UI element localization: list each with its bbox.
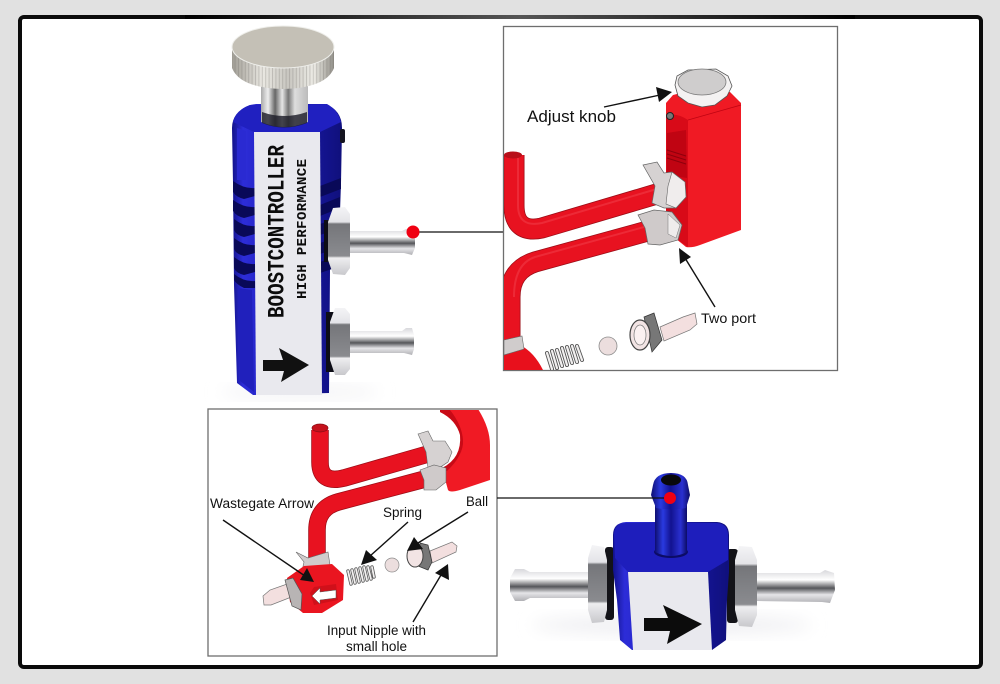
callout line: upper nipple to diagram bbox=[406, 226, 504, 238]
blue body bbox=[613, 522, 729, 650]
lower nipple bbox=[326, 308, 414, 375]
cap bbox=[675, 69, 732, 107]
top nipple bbox=[654, 546, 688, 558]
label: wastegate arrow: Wastegate Arrow bbox=[210, 496, 314, 511]
knob stem bbox=[261, 86, 308, 127]
label: input nipple: small hole bbox=[346, 639, 407, 654]
red body top right bbox=[440, 409, 490, 492]
drop shadow bbox=[220, 386, 380, 398]
right nipple bbox=[757, 570, 835, 603]
fittings bbox=[418, 431, 452, 470]
cooling fins bbox=[233, 178, 341, 288]
label: input nipple: Input Nipple with bbox=[327, 623, 426, 638]
label: two port: Two port bbox=[701, 310, 756, 326]
tubes bbox=[320, 430, 428, 479]
callout line: top nipple to diagram bbox=[497, 492, 676, 504]
spring bbox=[547, 346, 582, 369]
panel: adjust knob and two port diagram bbox=[504, 26, 838, 370]
nipple bbox=[430, 542, 457, 563]
label: ball: Ball bbox=[466, 494, 488, 509]
red valve bbox=[287, 564, 344, 613]
upper nipple bbox=[324, 207, 415, 275]
lower red part bbox=[504, 345, 543, 370]
fittings bbox=[643, 162, 686, 208]
left nipple bbox=[262, 584, 290, 606]
panel: wastegate exploded diagram bbox=[208, 409, 497, 656]
arrow: two port bbox=[679, 248, 715, 307]
arrow: spring bbox=[361, 522, 408, 565]
label plate with text: HIGH PERFORMANCE bbox=[295, 159, 311, 299]
side screw bbox=[340, 129, 345, 143]
label: adjust knob: Adjust knob bbox=[527, 108, 616, 126]
arrow: ball bbox=[407, 512, 468, 551]
white label with arrow bbox=[628, 572, 712, 650]
label plate with text bbox=[254, 132, 322, 395]
arrow: adjust knob bbox=[604, 87, 672, 107]
drop shadow bbox=[532, 615, 812, 635]
ball bbox=[385, 558, 399, 572]
nipple bbox=[660, 313, 697, 341]
knurled knob bbox=[232, 47, 334, 89]
ball bbox=[599, 337, 617, 355]
blue body bbox=[232, 104, 342, 395]
spring bbox=[348, 567, 374, 584]
arrow: wastegate bbox=[223, 520, 314, 582]
label: input nipple bbox=[327, 623, 426, 654]
label: spring: Spring bbox=[383, 505, 422, 520]
tubes bbox=[514, 155, 660, 229]
photo: boost controller T fitting bbox=[510, 473, 835, 650]
photo: boost controller upright bbox=[220, 26, 415, 398]
left nipple bbox=[510, 569, 588, 601]
arrow: input nipple bbox=[413, 564, 449, 622]
label plate with text: BOOSTCONTROLLER bbox=[264, 145, 290, 318]
red valve body bbox=[666, 92, 741, 247]
